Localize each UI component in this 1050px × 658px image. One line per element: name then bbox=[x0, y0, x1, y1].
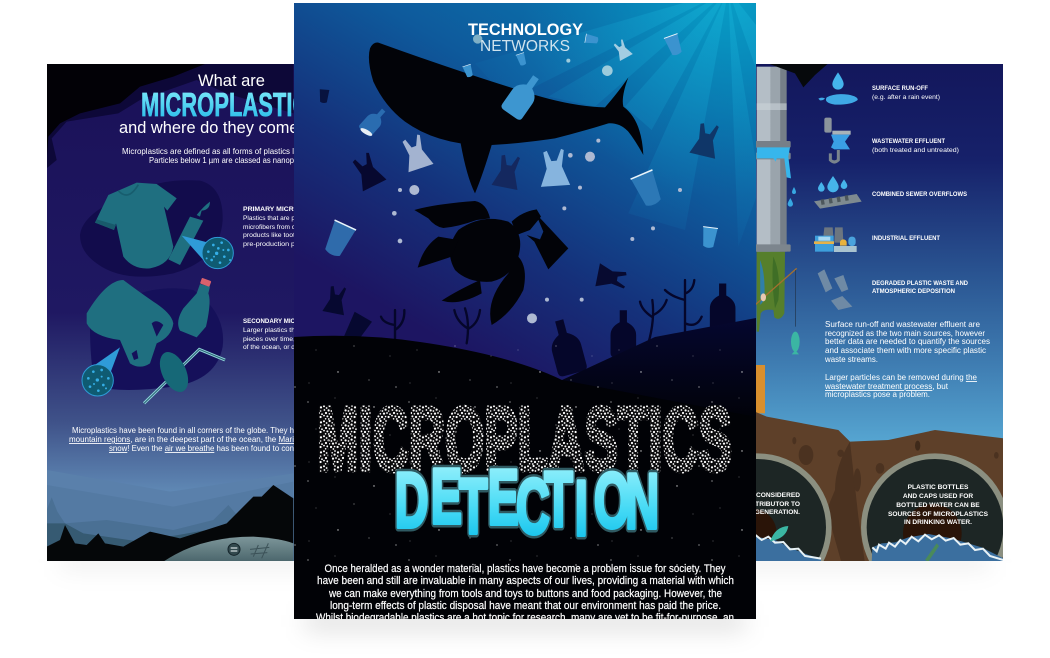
source labels bbox=[872, 85, 968, 295]
primary microplastics text bbox=[243, 206, 294, 248]
callout: plastic bottles text: AND CAPS USED FOR bbox=[903, 493, 973, 500]
primary microplastics text: products like toot bbox=[243, 232, 295, 239]
primary microplastics text: pre-production p bbox=[243, 241, 296, 248]
icon: degraded plastic waste bbox=[818, 269, 852, 310]
source labels: (both treated and untreated) bbox=[872, 147, 959, 154]
intro paragraph: we can make everything from tools and toys to buttons and food packaging. However, the bbox=[328, 588, 722, 600]
source labels: COMBINED SEWER OVERFLOWS bbox=[872, 191, 968, 198]
mountain landscape bbox=[47, 482, 294, 561]
callout: contributor text bbox=[756, 492, 800, 514]
text: main sources paragraph: Surface run-off and wastewater effluent are bbox=[825, 319, 980, 329]
logo: technology networks: NETWORKS bbox=[480, 38, 570, 55]
illustration: primary microplastics bbox=[80, 180, 233, 277]
logo: technology networks: TECHNOLOGY bbox=[468, 20, 584, 39]
icon: industrial effluent bbox=[814, 227, 857, 252]
source labels: ATMOSPHERIC DEPOSITION bbox=[872, 288, 955, 295]
panel: sources of microplastics (right page) bbox=[756, 64, 1003, 561]
icon: surface run-off bbox=[818, 72, 858, 105]
callout: plastic bottles text bbox=[888, 484, 989, 526]
text: main sources paragraph: microplastics pose a problem. bbox=[825, 389, 930, 399]
source labels: DEGRADED PLASTIC WASTE AND bbox=[872, 280, 968, 287]
callout: contributor text: GENERATION. bbox=[755, 509, 800, 516]
intro paragraph bbox=[316, 563, 734, 624]
text: found in all corners of the globe: snow! Even the air we breathe has been found to con bbox=[109, 443, 294, 453]
text: main sources paragraph: waste streams. bbox=[824, 354, 878, 364]
text: main sources paragraph: better data are needed to quantify the sources bbox=[825, 336, 991, 346]
illustration: ground and drain pipes bbox=[756, 365, 1003, 561]
text: main sources paragraph bbox=[824, 319, 991, 399]
callout: contributor text: D CONSIDERED bbox=[749, 492, 800, 499]
page shadows bbox=[60, 553, 990, 630]
title: detection: DETECTION bbox=[395, 453, 659, 552]
toothpaste tube bbox=[168, 217, 203, 265]
callout: plastic bottles text: SOURCES OF MICROPLASTICS bbox=[888, 511, 989, 518]
callout: contributor text: TRIBUTOR TO bbox=[755, 501, 800, 508]
text: found in all corners of the globe: mountain regions, are in the deepest part of the ocean, the Mari bbox=[69, 434, 294, 444]
primary microplastics text: Plastics that are p bbox=[243, 215, 296, 222]
straw and cap bbox=[144, 349, 225, 403]
callout: plastic bottles text: BOTTLED WATER CAN BE bbox=[896, 502, 980, 509]
secondary microplastics text: pieces over time, bbox=[243, 336, 295, 343]
bottle bbox=[178, 284, 210, 337]
magnifier cone bbox=[182, 236, 208, 260]
heading: what are microplastics: MICROPLASTICS bbox=[141, 87, 323, 124]
whale silhouette bbox=[369, 43, 643, 193]
illustration: pipe with slime and fishing rod bbox=[755, 63, 828, 354]
light plastic debris bbox=[321, 34, 718, 260]
text: main sources paragraph: recognized as the two main sources, however bbox=[825, 328, 985, 338]
text: main sources paragraph: and associate them with more specific plastic bbox=[825, 345, 987, 355]
title: detection: DETECTION bbox=[395, 453, 659, 552]
secondary microplastics text: of the ocean, or d bbox=[243, 344, 296, 351]
secondary microplastics text: Larger plastics th bbox=[243, 327, 296, 334]
intro paragraph: long-term effects of plastic disposal have meant that our environment has paid the price. bbox=[330, 600, 721, 612]
text: found in all corners of the globe bbox=[69, 425, 294, 453]
panel: what are microplastics (left page) bbox=[47, 64, 294, 561]
icon: combined sewer overflows bbox=[814, 176, 862, 209]
intro paragraph: Once heralded as a wonder material, plastics have become a problem issue for society. They bbox=[324, 563, 726, 575]
primary microplastics text: microfibers from c bbox=[243, 224, 295, 231]
seabed hills bbox=[294, 318, 756, 619]
illustration: secondary microplastics bbox=[82, 278, 225, 403]
secondary microplastics text bbox=[243, 318, 296, 351]
intro paragraph: have been and still are invaluable in many aspects of our lives, providing a material with which bbox=[317, 575, 734, 587]
definition text bbox=[122, 148, 294, 164]
cave ceiling bbox=[47, 63, 293, 168]
panel: microplastics detection (centre page) bbox=[294, 3, 756, 619]
magnifier cone bbox=[96, 348, 120, 371]
source labels: INDUSTRIAL EFFLUENT bbox=[872, 235, 940, 242]
text: main sources paragraph: wastewater treatment process, but bbox=[824, 381, 949, 391]
source labels: (e.g. after a rain event) bbox=[872, 94, 940, 101]
coral silhouettes bbox=[381, 280, 702, 343]
definition text: Particles below 1 µm are classed as nanop bbox=[149, 155, 294, 165]
secondary microplastics text: SECONDARY MIC bbox=[243, 318, 295, 325]
text: found in all corners of the globe: Microplastics have been found in all corners of the globe. They h bbox=[72, 425, 294, 435]
heading: what are microplastics bbox=[120, 74, 294, 136]
illustration: light rays, marine life and plastic debris bbox=[320, 3, 756, 376]
dark plastic debris bbox=[319, 89, 735, 377]
t-shirt bbox=[95, 183, 177, 269]
callout: plastic bottles text: PLASTIC BOTTLES bbox=[908, 484, 969, 491]
jug bbox=[87, 280, 173, 367]
bubbles bbox=[392, 34, 682, 323]
intro paragraph: Whilst biodegradable plastics are a hot topic for research, many are yet to be fit-for-purpose, an bbox=[316, 612, 734, 624]
source labels: SURFACE RUN-OFF bbox=[872, 85, 928, 92]
heading: what are microplastics: What are bbox=[198, 72, 265, 90]
title: microplastics: MICROPLASTICS bbox=[317, 390, 732, 490]
heading: what are microplastics: and where do they come from? bbox=[119, 119, 345, 137]
definition text: Microplastics are defined as all forms of plastics l bbox=[122, 146, 294, 156]
source labels: WASTEWATER EFFLUENT bbox=[872, 138, 945, 145]
callout: plastic bottles text: IN DRINKING WATER. bbox=[904, 519, 972, 526]
icon: wastewater toilet bbox=[824, 118, 851, 162]
logo: technology networks bbox=[468, 24, 583, 51]
text: main sources paragraph: Larger particles can be removed during the bbox=[825, 372, 977, 382]
primary microplastics text: PRIMARY MICRO bbox=[243, 206, 299, 213]
sea turtle silhouette bbox=[414, 201, 568, 325]
